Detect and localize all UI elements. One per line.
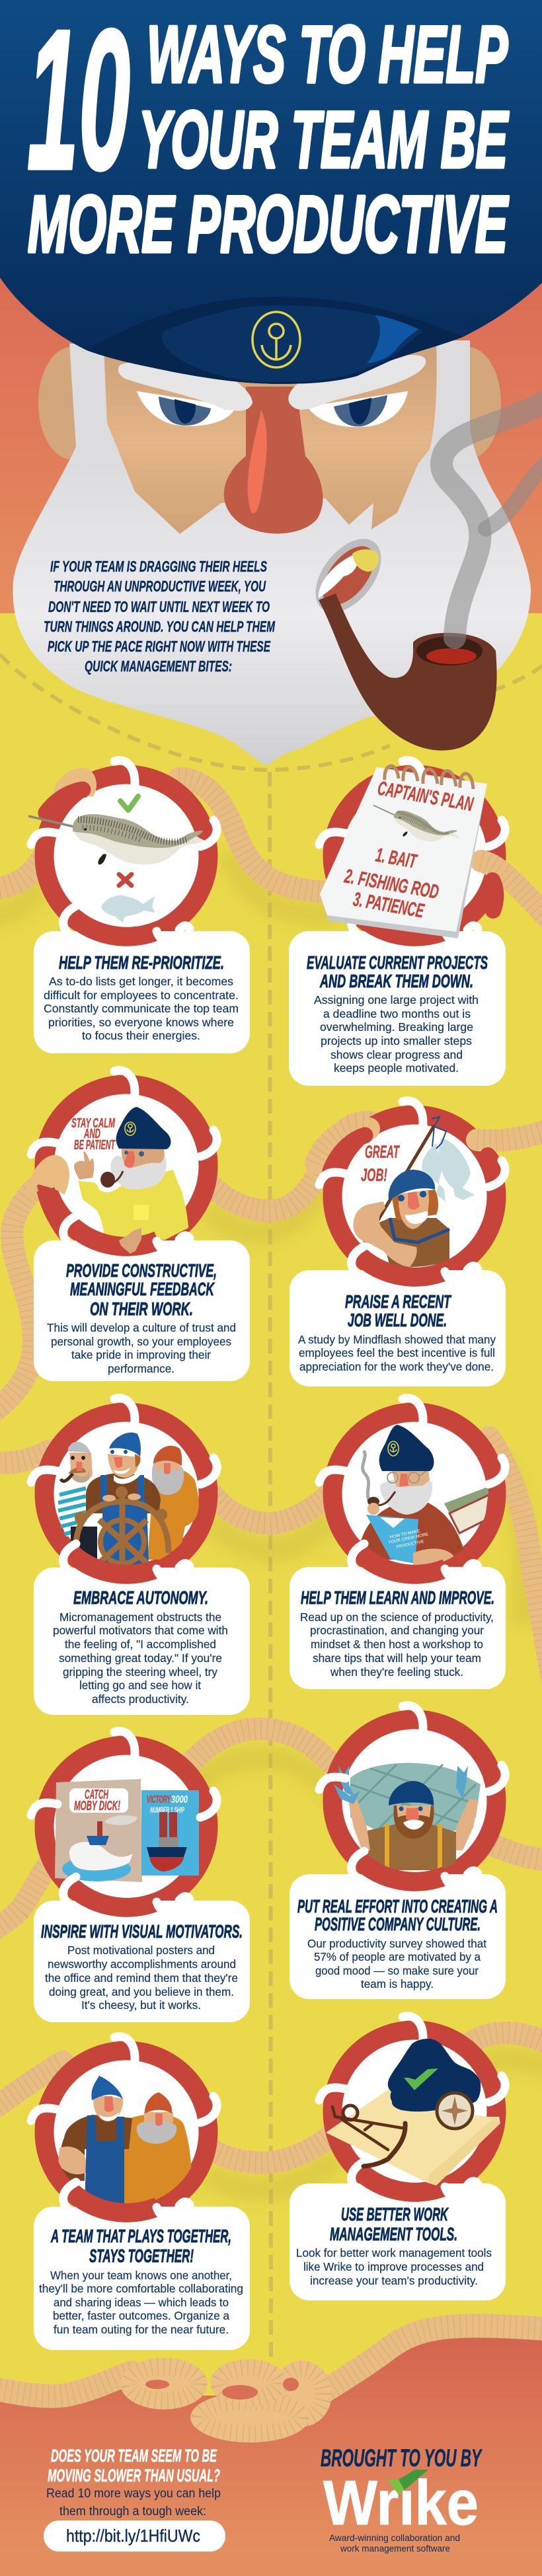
body text: Our productivity survey showed that: [307, 1937, 486, 1950]
body text: [39, 2269, 243, 2336]
rope over ring: [316, 1127, 542, 1183]
body text: appreciation for the work they've done.: [299, 1360, 494, 1373]
heading: [330, 2204, 457, 2244]
body text: better, faster outcomes. Organize a: [53, 2309, 229, 2322]
call to action text: them through a tough week:: [59, 2505, 206, 2519]
blue poster: NUMBER 1 SHIP: [150, 1805, 185, 1815]
heading: INSPIRE WITH VISUAL MOTIVATORS.: [41, 1921, 243, 1942]
intro text: THROUGH AN UNPRODUCTIVE WEEK, YOU: [54, 578, 266, 595]
pipe smoke: [442, 397, 542, 638]
body text: affects productivity.: [92, 1692, 189, 1706]
body text: [53, 1610, 228, 1706]
icon: captain's plan notepad: [320, 766, 487, 938]
illustration: fisherman carrying a net of fish: [348, 1763, 481, 1874]
illustration: fisherman holding a fish on a pole: GREAT: [365, 1142, 400, 1162]
body text: [47, 1321, 236, 1375]
wordmark: Wrike: Wrıke: [323, 2468, 479, 2538]
body text: Look for better work management tools: [296, 2246, 492, 2259]
body text: take pride in improving their: [71, 1348, 211, 1361]
illustration: captain in yellow coat: STAY CALM: [71, 1116, 116, 1131]
body text: personal growth, so your employees: [51, 1335, 231, 1348]
fish in net: [334, 1766, 468, 1804]
intro text: [44, 558, 275, 675]
panel: praise a recent job: [290, 1101, 542, 1386]
body text: overwhelming. Breaking large: [320, 1020, 473, 1034]
heading: HELP THEM RE-PRIORITIZE.: [59, 952, 224, 973]
beige poster: CATCH: [85, 1788, 108, 1802]
card: [34, 1901, 250, 2022]
body text: something great today." If you're: [59, 1651, 222, 1665]
hat with check mark: [388, 2039, 481, 2111]
panel: help them re-prioritize: [28, 761, 250, 1053]
body text: powerful motivators that come with: [53, 1624, 228, 1637]
tagline: Award-winning collaboration and: [329, 2533, 460, 2543]
sailor in striped shirt: [58, 1442, 97, 1560]
call to action text: [46, 2487, 221, 2519]
body text: newsworthy accomplishments around: [48, 1957, 236, 1971]
rope: connecting rings behind the life rings: [0, 778, 542, 2163]
hand resting on ring: [119, 1228, 141, 1254]
mouth with gold tooth: [303, 527, 394, 625]
body text: the office and remind them that they're: [45, 1971, 238, 1985]
panel: learn and improve: [290, 1398, 506, 1689]
question heading: [48, 2446, 220, 2485]
body text: increase your team's productivity.: [310, 2274, 478, 2287]
sextant: [332, 2105, 405, 2166]
body text: Read up on the science of productivity,: [300, 1610, 494, 1624]
illustration: captain reading a book: HOW TO MAKE: [389, 1529, 421, 1540]
pipe: [319, 593, 497, 751]
card: [290, 1567, 506, 1689]
link pill: http://bit.ly/1HfiUWc: [66, 2526, 200, 2546]
intro text: PICK UP THE PACE RIGHT NOW WITH THESE: [48, 638, 271, 655]
rope knot: [0, 2326, 542, 2443]
body text: This will develop a culture of trust and: [47, 1321, 236, 1334]
illustration: captain in yellow coat: [71, 1107, 188, 1245]
illustration: captain reading a book: YOUR CREW MORE: [388, 1532, 429, 1545]
body text: Micromanagement obstructs the: [59, 1610, 221, 1624]
card: [290, 2183, 506, 2300]
nose: [224, 387, 323, 534]
heading: [66, 1260, 217, 1319]
sailor in orange coat: [147, 1446, 199, 1560]
heading: ON THEIR WORK.: [90, 1299, 193, 1319]
body text: priorities, so everyone knows where: [48, 1016, 234, 1029]
visor shine: [367, 315, 418, 363]
icon: captain's plan notepad: 3. PATIENCE: [352, 888, 426, 923]
card: [34, 1568, 250, 1715]
heading: PROVIDE CONSTRUCTIVE,: [66, 1260, 217, 1281]
card: [290, 1270, 506, 1386]
body text: [45, 1944, 238, 2012]
heading: [50, 2226, 231, 2266]
footer call to action: [44, 2446, 225, 2552]
heading: PRAISE A RECENT: [345, 1291, 452, 1312]
blue poster: [141, 1790, 199, 1875]
panel: evaluate current projects: [289, 761, 542, 1086]
yellow sweater background: [0, 613, 542, 2464]
right eye: [307, 391, 408, 427]
body text: 57% of people are motivated by a: [314, 1950, 481, 1963]
footer background: [0, 2326, 542, 2576]
heading: USE BETTER WORK: [341, 2204, 449, 2224]
panel: embrace autonomy: [31, 1398, 250, 1715]
heading: MANAGEMENT TOOLS.: [330, 2224, 457, 2244]
body text: the feeling of, "I accomplished: [65, 1638, 216, 1651]
illustration: captain reading a book: PRODUCTIVE: [396, 1539, 425, 1550]
blue poster: VICTORY: [147, 1794, 171, 1805]
body text: performance.: [108, 1362, 174, 1375]
body text: letting go and see how it: [79, 1679, 201, 1692]
blue poster: 3000: [171, 1794, 188, 1805]
body text: mindset & then host a workshop to: [311, 1638, 483, 1651]
illustration: fisherman holding a fish on a pole: [353, 1117, 475, 1267]
captain hat: [0, 0, 542, 384]
beige poster: MOBY DICK!: [74, 1799, 120, 1813]
rope looping over ring: [25, 1155, 69, 1236]
heading: MEANINGFUL FEEDBACK: [70, 1279, 215, 1299]
question heading: MOVING SLOWER THAN USUAL?: [48, 2466, 220, 2485]
illustration: captain in yellow coat: AND: [83, 1127, 100, 1141]
tagline: [329, 2533, 460, 2554]
body text: [298, 1333, 496, 1373]
ears: [38, 347, 501, 459]
rope shadows: [0, 852, 542, 2189]
face: [104, 340, 437, 534]
body text: When your team knows one another,: [50, 2269, 232, 2282]
icon: captain's plan notepad: 2. FISHING ROD: [342, 865, 440, 903]
intro text: QUICK MANAGEMENT BITES:: [85, 658, 232, 675]
anchor emblem: [252, 312, 300, 367]
tagline: work management software: [340, 2544, 450, 2554]
body text: projects up into smaller steps: [321, 1034, 472, 1047]
body text: [44, 975, 239, 1042]
body text: keeps people motivated.: [334, 1061, 459, 1075]
beard: [13, 340, 531, 766]
body text: gripping the steering wheel, try: [63, 1665, 217, 1679]
illustration: three sailors at the wheel: [58, 1433, 199, 1568]
hat visor: [87, 297, 463, 384]
heading: [297, 1896, 498, 1934]
illustration: captain in yellow coat: BE PATIENT: [74, 1138, 116, 1153]
title: [27, 0, 509, 269]
card: [34, 931, 250, 1053]
icon: captain's plan notepad: CAPTAIN'S PLAN: [376, 777, 475, 815]
footer sponsor logo: [321, 2444, 483, 2554]
illustration: captain reading a book: [357, 1425, 489, 1566]
body text: a deadline two months out is: [323, 1007, 471, 1020]
heading: [307, 952, 488, 991]
panel: better work management tools: [290, 2016, 506, 2300]
body text: [307, 1937, 486, 1990]
body text: employees feel the best incentive is full: [299, 1346, 495, 1359]
ship's wheel: [76, 1494, 169, 1568]
link pill: [44, 2520, 225, 2552]
illustration: fisherman holding a fish on a pole: JOB!: [361, 1165, 387, 1185]
body text: It's cheesy, but it works.: [81, 1998, 201, 2012]
illustration: hat, map, compass and sextant: [326, 2039, 500, 2185]
body text: [300, 1610, 494, 1679]
body text: they'll be more comfortable collaborating: [39, 2282, 243, 2295]
icon: green check: [387, 2470, 428, 2495]
card: [34, 2207, 250, 2350]
hanging fish: [422, 1138, 475, 1201]
body text: [296, 2246, 492, 2287]
heading: [345, 1291, 452, 1330]
icon: captain's plan notepad: 1. BAIT: [374, 844, 419, 873]
sky background: [0, 0, 542, 661]
card: [34, 1240, 250, 1381]
eyebrows: [118, 355, 426, 411]
card: [290, 1874, 506, 1999]
heading: A TEAM THAT PLAYS TOGETHER,: [50, 2226, 231, 2246]
question heading: DOES YOUR TEAM SEEM TO BE: [51, 2446, 217, 2466]
beige poster: [55, 1779, 142, 1882]
body text: Post motivational posters and: [67, 1944, 215, 1957]
rope over ring: [481, 861, 542, 922]
heading: EMBRACE AUTONOMY.: [73, 1587, 208, 1608]
captain illustration: [13, 340, 542, 766]
body text: share tips that will help your team: [313, 1651, 481, 1665]
body text: Assigning one large project with: [314, 993, 479, 1006]
heading: JOB WELL DONE.: [348, 1310, 447, 1330]
left eye: [137, 391, 235, 426]
body text: good mood — so make sure your: [315, 1964, 479, 1977]
card: [289, 931, 506, 1086]
intro text: IF YOUR TEAM IS DRAGGING THEIR HEELS: [50, 558, 267, 575]
body text: A study by Mindflash showed that many: [298, 1333, 496, 1346]
visor front: [162, 305, 423, 382]
intro text: DON'T NEED TO WAIT UNTIL NEXT WEEK TO: [48, 598, 270, 615]
body text: procrastination, and changing your: [310, 1624, 484, 1637]
illustration: motivational posters: [55, 1779, 199, 1882]
body text: and sharing ideas — which leads to: [54, 2296, 229, 2309]
sailor in blue hat with overalls: [86, 1433, 161, 1566]
body text: Constantly communicate the top team: [44, 1002, 239, 1015]
body text: when they're feeling stuck.: [330, 1665, 463, 1679]
intro text: TURN THINGS AROUND. YOU CAN HELP THEM: [44, 618, 275, 635]
panel: team that plays together: [31, 2037, 250, 2350]
panel: inspire with visual motivators: [31, 1731, 250, 2022]
map: [326, 2090, 500, 2185]
body text: team is happy.: [361, 1977, 434, 1990]
body text: As to-do lists get longer, it becomes: [49, 975, 233, 988]
illustration: two sailors arm in arm: [58, 2076, 192, 2207]
body text: [314, 993, 479, 1075]
centre dashed seam: [270, 772, 271, 2363]
body text: to focus their energies.: [82, 1029, 200, 1042]
rope looping over ring: [46, 768, 97, 813]
body text: shows clear progress and: [330, 1048, 463, 1061]
panel: positive company culture: [290, 1706, 506, 1999]
icon: narwhal with check over fish with cross: [28, 796, 212, 923]
body text: fun team outing for the near future.: [54, 2323, 229, 2336]
body text: doing great, and you believe in them.: [49, 1985, 234, 1998]
panel: constructive feedback: [25, 1071, 250, 1381]
heading: STAYS TOGETHER!: [89, 2246, 194, 2266]
body text: like Wrike to improve processes and: [303, 2260, 484, 2273]
body text: difficult for employees to concentrate.: [44, 989, 239, 1002]
compass: [437, 2093, 473, 2129]
sweater collar stitching: [0, 654, 542, 770]
call to action text: Read 10 more ways you can help: [46, 2487, 221, 2501]
